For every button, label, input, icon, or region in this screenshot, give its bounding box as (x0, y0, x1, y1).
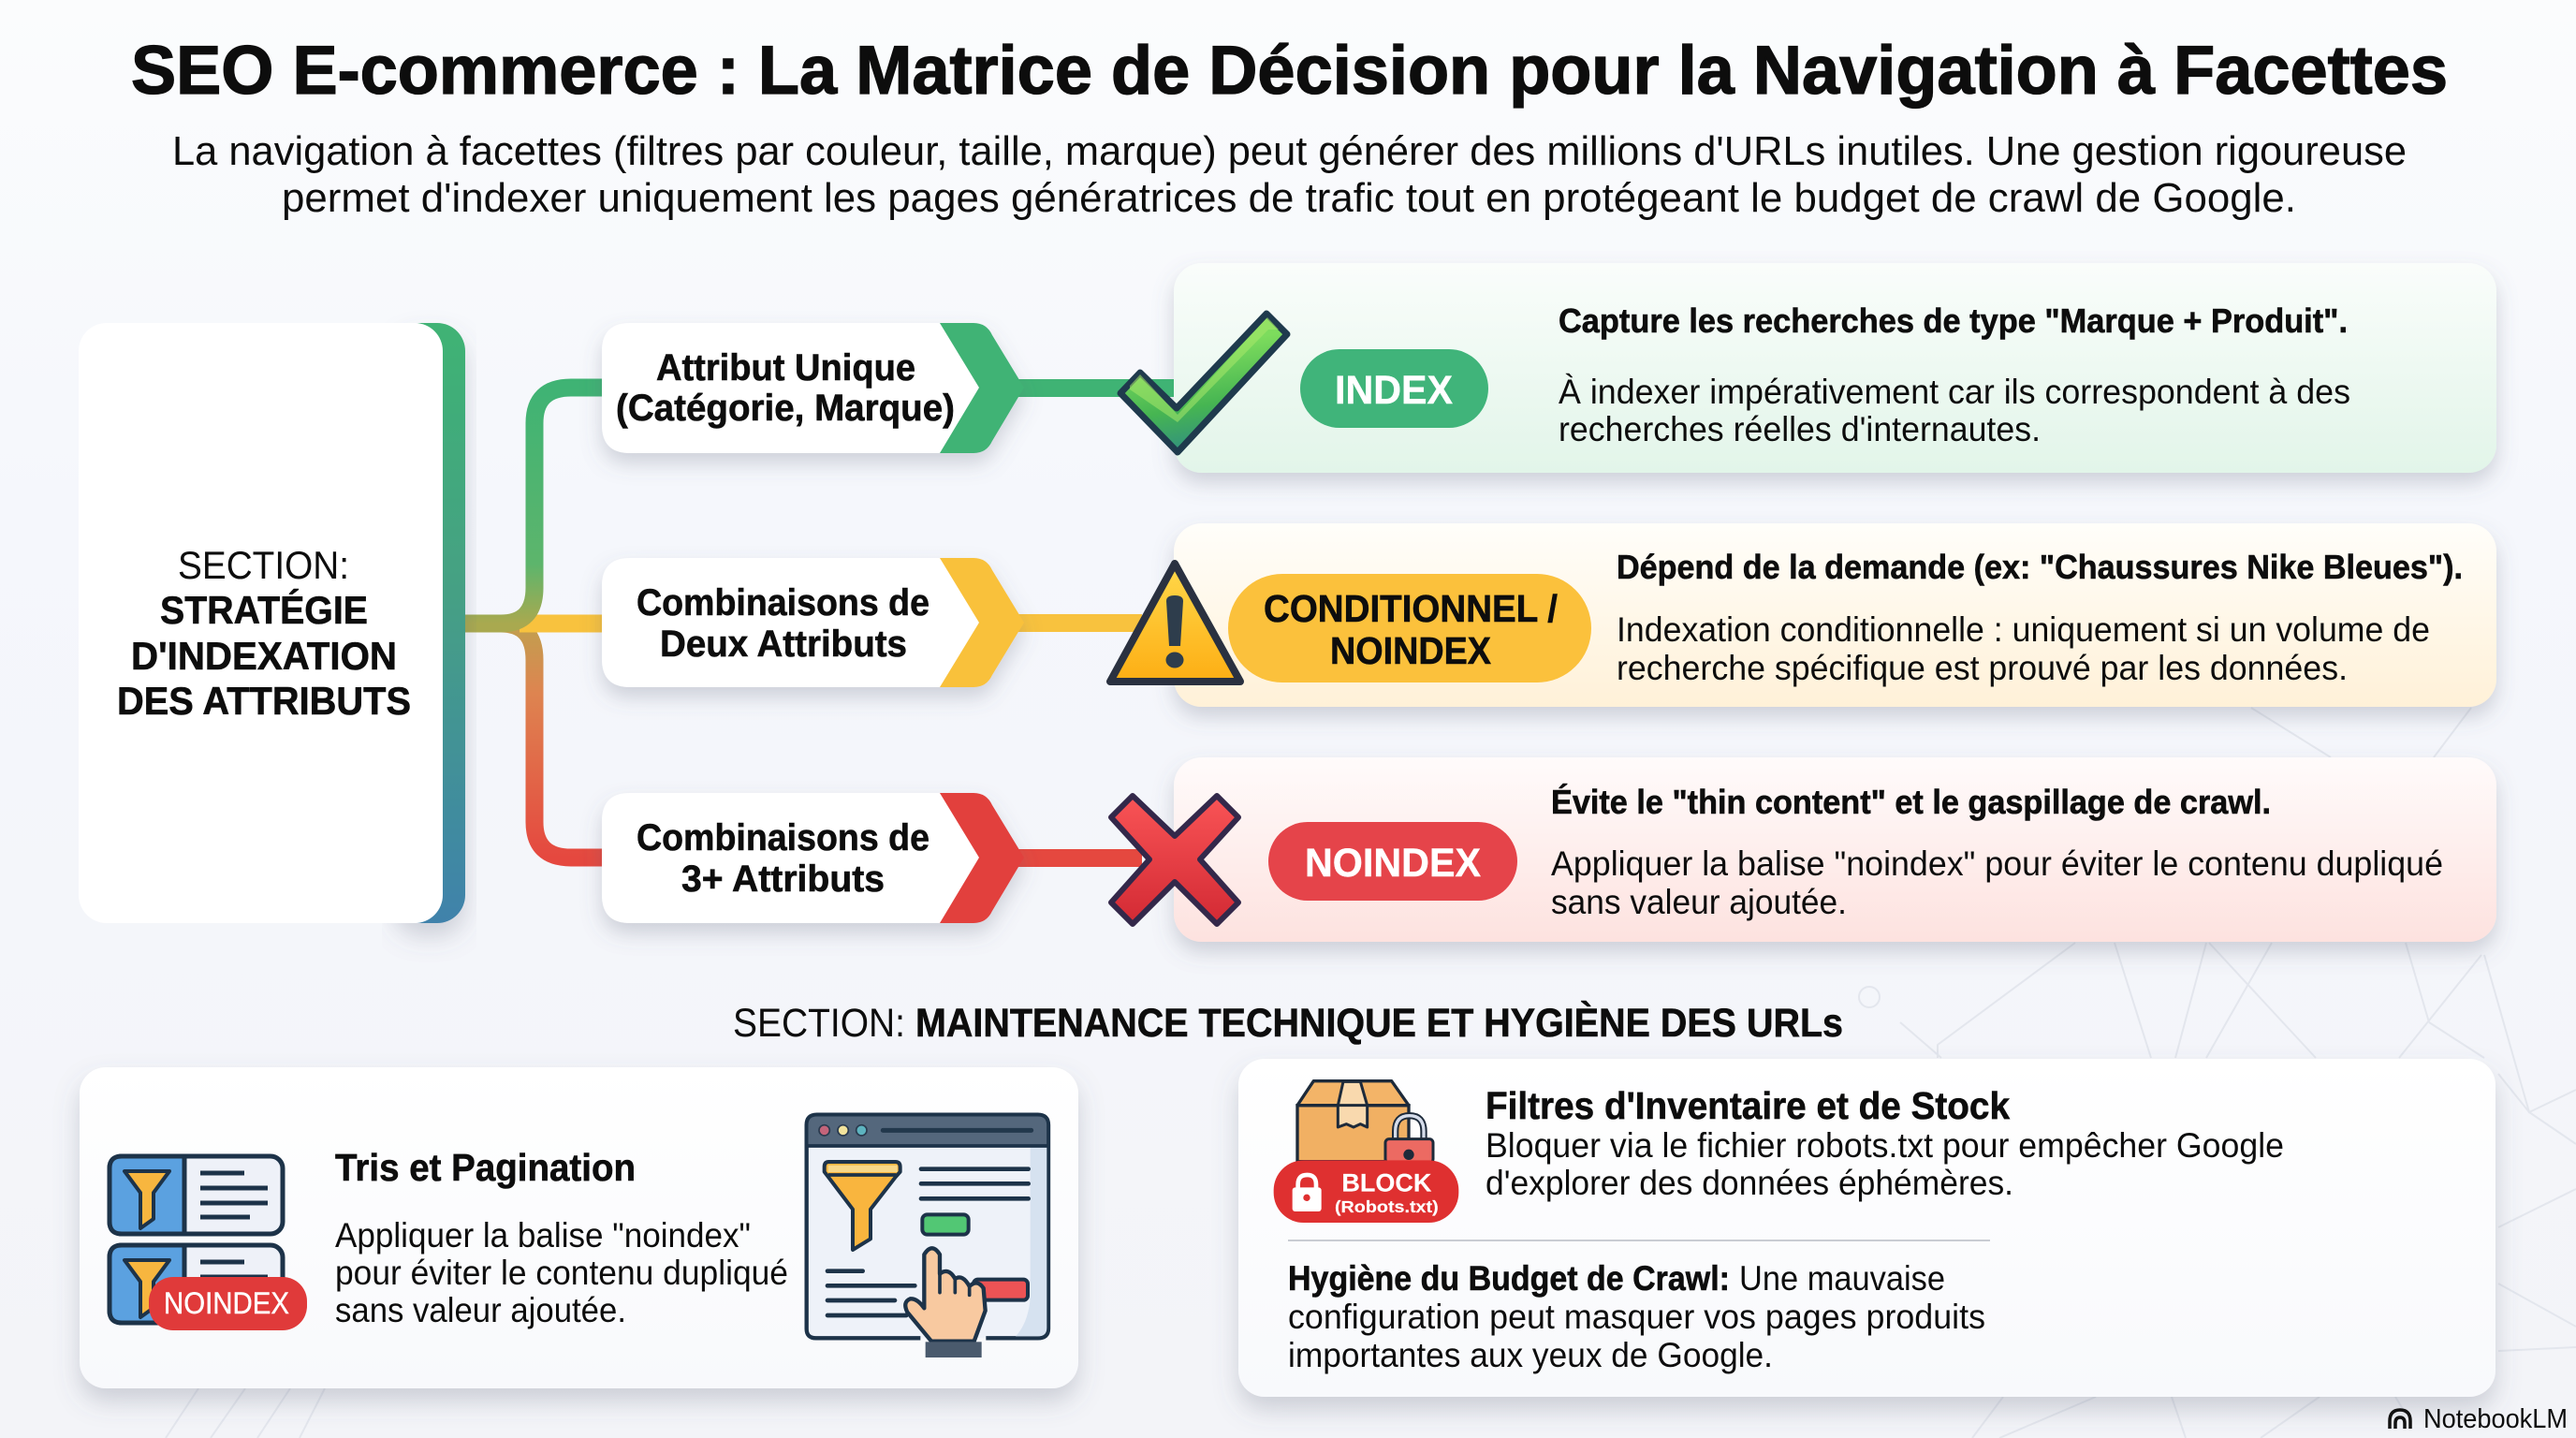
icon: filtered lists with noindex badge: NOINDEX (164, 1286, 289, 1320)
heading: filtres: Filtres d'Inventaire et de Stock (1486, 1084, 2010, 1127)
section label: SECTION: (178, 543, 349, 587)
attribute pill: three plus (602, 793, 1024, 923)
subtitle: La navigation à facettes (filtres par couleur, taille, marque) peut générer des millions d'URLs inutiles. Une gestion rigoureuse (172, 128, 2407, 174)
text: hygiene: importantes aux yeux de Google. (1288, 1336, 1773, 1374)
text: hygiene: Une mauvaise (1739, 1259, 1945, 1298)
badge: noindex (1268, 822, 1517, 901)
text: conditional explanation: recherche spécifique est prouvé par les données. (1617, 649, 2348, 687)
text: tris et pagination: sans valeur ajoutée. (335, 1291, 626, 1329)
logo: notebooklm: NotebookLM (2423, 1404, 2568, 1434)
section label: DES ATTRIBUTS (117, 679, 411, 723)
text: tris et pagination: Appliquer la balise "noindex" (335, 1216, 751, 1255)
text: filtres: Bloquer via le fichier robots.txt pour empêcher Google (1486, 1126, 2284, 1165)
text: filtres (1486, 1126, 2284, 1202)
text: hygiene (1288, 1259, 1985, 1374)
icon: check mark (1120, 314, 1287, 452)
icon: filtered lists with noindex badge (110, 1156, 307, 1330)
attribute pill: two: Combinaisons de (637, 582, 929, 624)
panel: index result card (1174, 263, 2496, 473)
badge: conditional: NOINDEX (1330, 629, 1491, 672)
panel: filtres et hygiene (1238, 1059, 2496, 1397)
icon: locked box with block badge: BLOCK (1341, 1169, 1431, 1197)
row 2 connector (1016, 614, 1142, 632)
icon: warning triangle (1110, 564, 1240, 682)
text: noindex explanation: Appliquer la balise "noindex" pour éviter le contenu dupliqué (1551, 844, 2443, 883)
text: conditional explanation: Indexation conditionnelle : uniquement si un volume de (1617, 610, 2430, 649)
text: noindex explanation: Évite le "thin content" et le gaspillage de crawl. (1551, 783, 2271, 821)
text: hygiene: Hygiène du Budget de Crawl: (1288, 1259, 1730, 1298)
text: index explanation: Capture les recherches de type "Marque + Produit". (1559, 301, 2348, 340)
attribute pill: single (602, 323, 1024, 453)
attribute pill: two (602, 558, 1024, 687)
text: filtres: d'explorer des données éphémères. (1486, 1164, 2013, 1202)
heading: tris et pagination: Tris et Pagination (335, 1146, 636, 1189)
row 3 connector (1016, 849, 1142, 867)
text: index explanation (1559, 301, 2350, 448)
badge: conditional: CONDITIONNEL / (1264, 587, 1558, 630)
subtitle (172, 128, 2407, 221)
title: SEO E-commerce : La Matrice de Décision pour la Navigation à Facettes (131, 33, 2448, 109)
panel: section strategy (79, 323, 465, 923)
text: index explanation: À indexer impérativement car ils correspondent à des (1559, 373, 2350, 411)
icon: locked box with block badge (1274, 1081, 1458, 1223)
text: conditional explanation: Dépend de la demande (ex: "Chaussures Nike Bleues"). (1617, 548, 2463, 586)
text: noindex explanation: sans valeur ajoutée. (1551, 883, 1847, 921)
attribute pill: three plus: Combinaisons de (637, 817, 929, 858)
text: tris et pagination: pour éviter le contenu dupliqué (335, 1254, 788, 1292)
attribute pill: single: (Catégorie, Marque) (616, 388, 955, 429)
text: noindex explanation (1551, 783, 2443, 921)
text: conditional explanation (1617, 548, 2463, 687)
text: hygiene: configuration peut masquer vos pages produits (1288, 1298, 1985, 1336)
panel: noindex result card (1174, 757, 2496, 942)
badge: index: INDEX (1335, 368, 1453, 413)
attribute pill: two: Deux Attributs (660, 624, 907, 665)
section label (117, 543, 411, 723)
heading: maintenance section: SECTION: (733, 1001, 905, 1046)
section label: STRATÉGIE (160, 588, 368, 632)
text: tris et pagination (335, 1216, 788, 1329)
heading: maintenance section: MAINTENANCE TECHNIQUE ET HYGIÈNE DES URLs (915, 1001, 1843, 1046)
icon: locked box with block badge: (Robots.txt) (1335, 1197, 1439, 1216)
attribute pill: three plus: 3+ Attributs (681, 858, 885, 900)
attribute pill: single: Attribut Unique (656, 347, 915, 389)
icon: red cross (1111, 796, 1238, 924)
row 1 connector (1016, 379, 1174, 397)
icon: browser with filter and hand (807, 1115, 1048, 1357)
badge: noindex: NOINDEX (1305, 841, 1481, 886)
section label: D'INDEXATION (131, 634, 397, 678)
badge: index (1300, 349, 1488, 428)
panel: tris et pagination (80, 1067, 1078, 1388)
subtitle: permet d'indexer uniquement les pages génératrices de trafic tout en protégeant le budget de crawl de Google. (282, 175, 2296, 221)
text: index explanation: recherches réelles d'internautes. (1559, 410, 2041, 448)
panel: conditional result card (1174, 523, 2496, 707)
badge: conditional (1228, 574, 1591, 682)
connector: tree from section card to attributes (465, 388, 602, 858)
